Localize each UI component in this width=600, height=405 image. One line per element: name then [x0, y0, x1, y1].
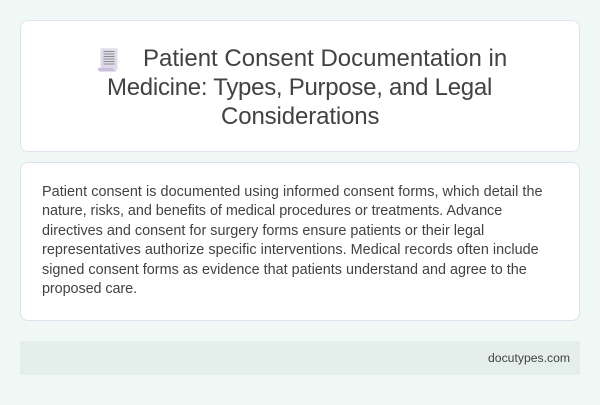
- text block: description: [42, 184, 543, 297]
- panel: title card: [20, 20, 580, 152]
- footer source text: docutypes.com: [488, 351, 570, 365]
- text block: description: representatives authorize specific interventions. Medical records often include: [42, 242, 539, 258]
- text block: description: Patient consent is documented using informed consent forms, which detail the: [42, 184, 543, 200]
- panel: description card: [20, 162, 580, 321]
- icon: document scroll: [98, 48, 118, 72]
- title: Patient Consent Documentation in: [143, 45, 507, 72]
- title: Medicine: Types, Purpose, and Legal: [107, 74, 492, 101]
- footer bar: [20, 341, 580, 375]
- title: [107, 45, 507, 130]
- title: Considerations: [221, 103, 379, 130]
- text block: description: proposed care.: [42, 281, 137, 297]
- text block: description: signed consent forms as evidence that patients understand and agree to the: [42, 262, 527, 278]
- text block: description: nature, risks, and benefits of medical procedures or treatments. Advance: [42, 203, 502, 219]
- text block: description: directives and consent for surgery forms ensure patients or their legal: [42, 223, 484, 239]
